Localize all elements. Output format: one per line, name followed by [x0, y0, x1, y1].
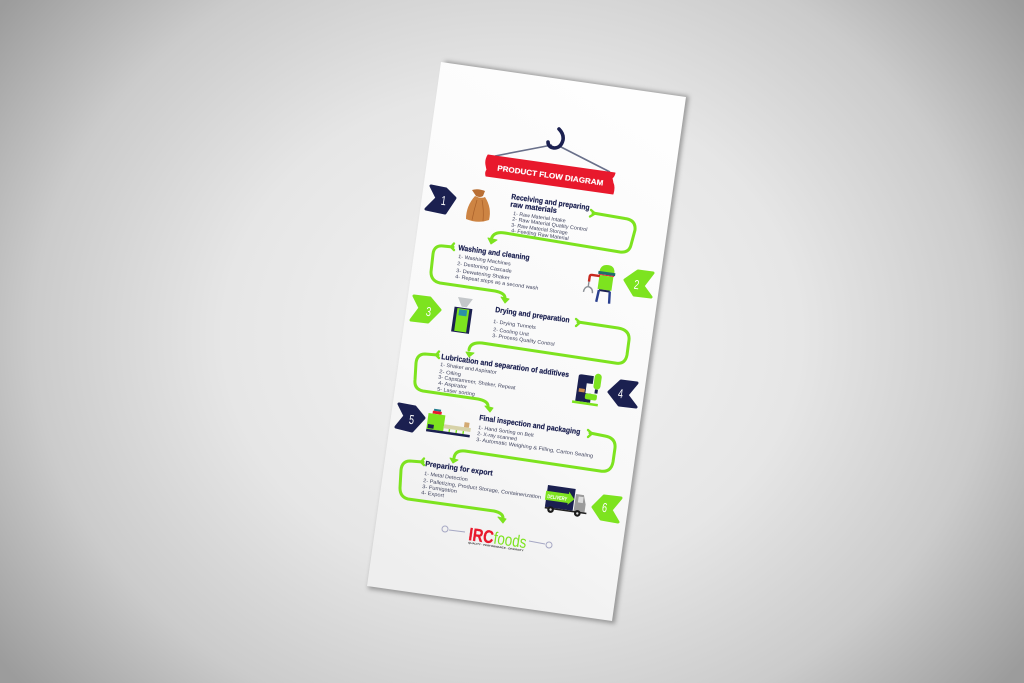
step 6 text	[421, 459, 541, 501]
step 4 text: 1- Shaker and Aspirator	[440, 362, 497, 376]
step 4 text: 3- Capstammer, Shaker, Repeat	[438, 375, 516, 392]
step 5 text: Final inspection and packaging	[479, 413, 581, 436]
icon: sorting machine	[572, 371, 602, 406]
arrow 1	[488, 210, 635, 252]
step 6 badge: 6	[601, 501, 608, 516]
icon: delivery truck	[543, 485, 590, 518]
step 2 badge	[625, 271, 653, 297]
step 6 text: 1- Metal Detection	[424, 471, 468, 483]
step 1 text: raw materials	[510, 200, 558, 215]
hook and ropes	[495, 129, 610, 172]
step 1 text: 4- Feeding Raw Material	[511, 228, 569, 242]
step 6 text: 2- Palletizing, Product Storage, Containerization	[423, 478, 541, 501]
paper shadow	[368, 61, 689, 624]
arrow 5	[450, 430, 615, 471]
arrow 2	[431, 244, 509, 303]
step 3 text	[492, 305, 571, 348]
step 6 badge	[593, 496, 621, 522]
step 3 badge: 3	[425, 305, 432, 320]
step 5 text: 1- Hand Sorting on Belt	[478, 425, 535, 439]
step 4 text: 4- Aspirator	[438, 381, 468, 391]
step 2 text: 2- Destoning Cascade	[457, 261, 512, 275]
paper sheet	[367, 62, 686, 621]
arrow 4	[415, 352, 493, 412]
step 6 text: Preparing for export	[425, 459, 494, 478]
step 1 text: 2- Raw Material Quality Control	[512, 217, 588, 233]
step 4 text	[437, 352, 570, 398]
icon: sack	[466, 189, 490, 222]
step 5 text	[476, 413, 593, 460]
step 4 text: 2- Oiling	[439, 369, 461, 378]
step 5 badge	[396, 404, 424, 431]
icon: packaging conveyor	[426, 408, 473, 437]
step 2 text	[455, 243, 539, 292]
step 3 badge	[411, 296, 440, 322]
step 2 text: 1- Washing Machines	[458, 254, 511, 268]
step 3 text: 1- Drying Tunnels	[493, 319, 537, 331]
step 6 text: 3- Fumigation	[422, 484, 457, 495]
step 1 text: 3- Raw Material Storage	[511, 223, 568, 237]
step 4 badge: 4	[617, 387, 624, 402]
step 4 text: Lubrication and separation of additives	[441, 352, 570, 379]
step 5 badge: 5	[408, 413, 415, 428]
step 5 text: 3- Automatic Weighing & Filling, Carton Sealing	[476, 437, 593, 460]
step 1 text: 1- Raw Material Intake	[513, 211, 566, 224]
step 1 badge: 1	[440, 194, 447, 209]
logo: IRC Foods: foods	[492, 529, 528, 552]
icon: delivery truck: DELIVERY	[547, 494, 568, 503]
logo: IRC Foods: QUALITY · PERFORMANCE · DIVERSITY	[468, 542, 524, 552]
arrow 3	[466, 319, 629, 363]
step 2 text: 4- Repeat steps as a second wash	[455, 274, 539, 292]
step 4 badge	[609, 381, 637, 407]
step 6 text: 4- Export	[421, 490, 445, 499]
step 4 text: 5- Laser sorting	[437, 387, 475, 398]
step 3 text: Drying and preparation	[495, 305, 571, 325]
icon: drying machine	[451, 297, 474, 334]
step 3 text: 3- Process Quality Control	[492, 333, 555, 348]
step 2 badge: 2	[633, 278, 640, 293]
logo: IRC Foods	[442, 524, 552, 552]
step 3 text: 2- Cooling Unit	[493, 327, 530, 338]
title banner	[486, 155, 615, 194]
step 2 text: 3- Dewatering Shaker	[456, 268, 510, 282]
step 1 badge	[426, 186, 455, 213]
title banner: PRODUCT FLOW DIAGRAM	[497, 164, 604, 188]
step 2 text: Washing and cleaning	[458, 243, 531, 262]
step 1 text	[510, 192, 591, 242]
icon: washing machine	[582, 262, 616, 304]
logo: IRC Foods: IRC	[467, 524, 495, 547]
arrow 6	[400, 458, 506, 523]
step 5 text: 2- X-ray scanned	[477, 431, 517, 443]
step 1 text: Receiving and preparing	[511, 192, 591, 212]
